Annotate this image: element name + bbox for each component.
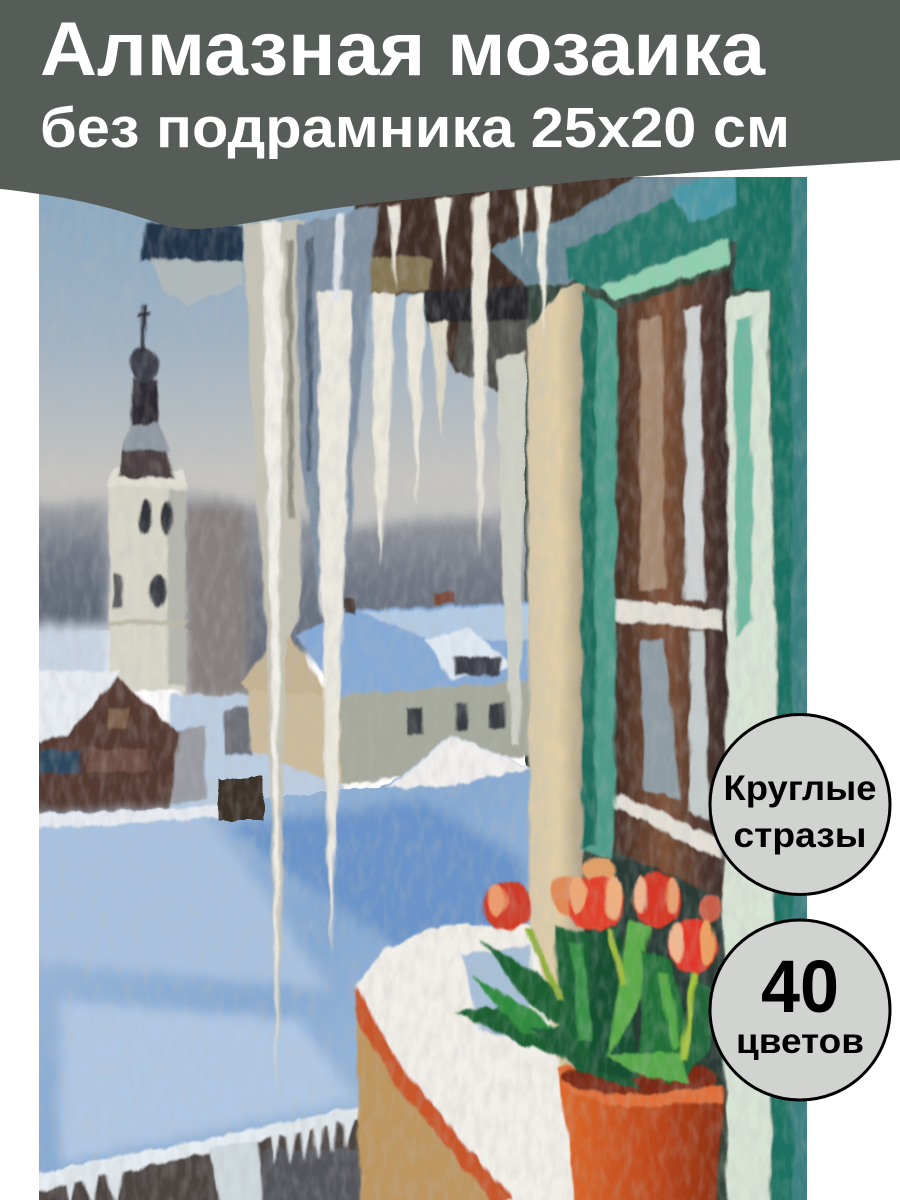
wooden house on the left xyxy=(20,670,178,815)
sky xyxy=(39,194,528,630)
header banner xyxy=(0,0,900,229)
title: Алмазная мозаика xyxy=(40,7,766,92)
badge: 40 colours: цветов xyxy=(736,1022,864,1061)
house wall by the window xyxy=(527,280,585,1100)
lower roof edge with small icicles xyxy=(39,1106,363,1200)
badge: round rhinestones: Круглые xyxy=(724,769,876,808)
badge: round rhinestones xyxy=(710,714,890,894)
base of the right side xyxy=(524,240,775,1200)
large house with snowy roof xyxy=(240,592,530,785)
window interior xyxy=(585,270,735,1100)
foreground snow field xyxy=(20,735,530,1200)
snowy window ledge xyxy=(356,925,585,1200)
flower pot xyxy=(558,1062,724,1200)
badge: 40 colours: 40 xyxy=(761,945,839,1028)
eaves and roof underside xyxy=(142,165,740,392)
tulip flowers xyxy=(483,857,722,974)
painting: winter view through a window xyxy=(20,160,825,1200)
icicles xyxy=(150,187,551,1095)
church bell tower xyxy=(106,306,188,690)
green window frame xyxy=(566,165,825,1200)
badge: 40 colours xyxy=(710,920,890,1100)
subtitle: без подрамника 25х20 см xyxy=(40,96,790,160)
badge: round rhinestones: стразы xyxy=(734,816,866,855)
painterly grain overlay xyxy=(39,177,807,1200)
forest on the horizon xyxy=(20,490,525,700)
trees and snow near village xyxy=(170,695,345,815)
tulip leaves and stems xyxy=(455,920,712,1090)
